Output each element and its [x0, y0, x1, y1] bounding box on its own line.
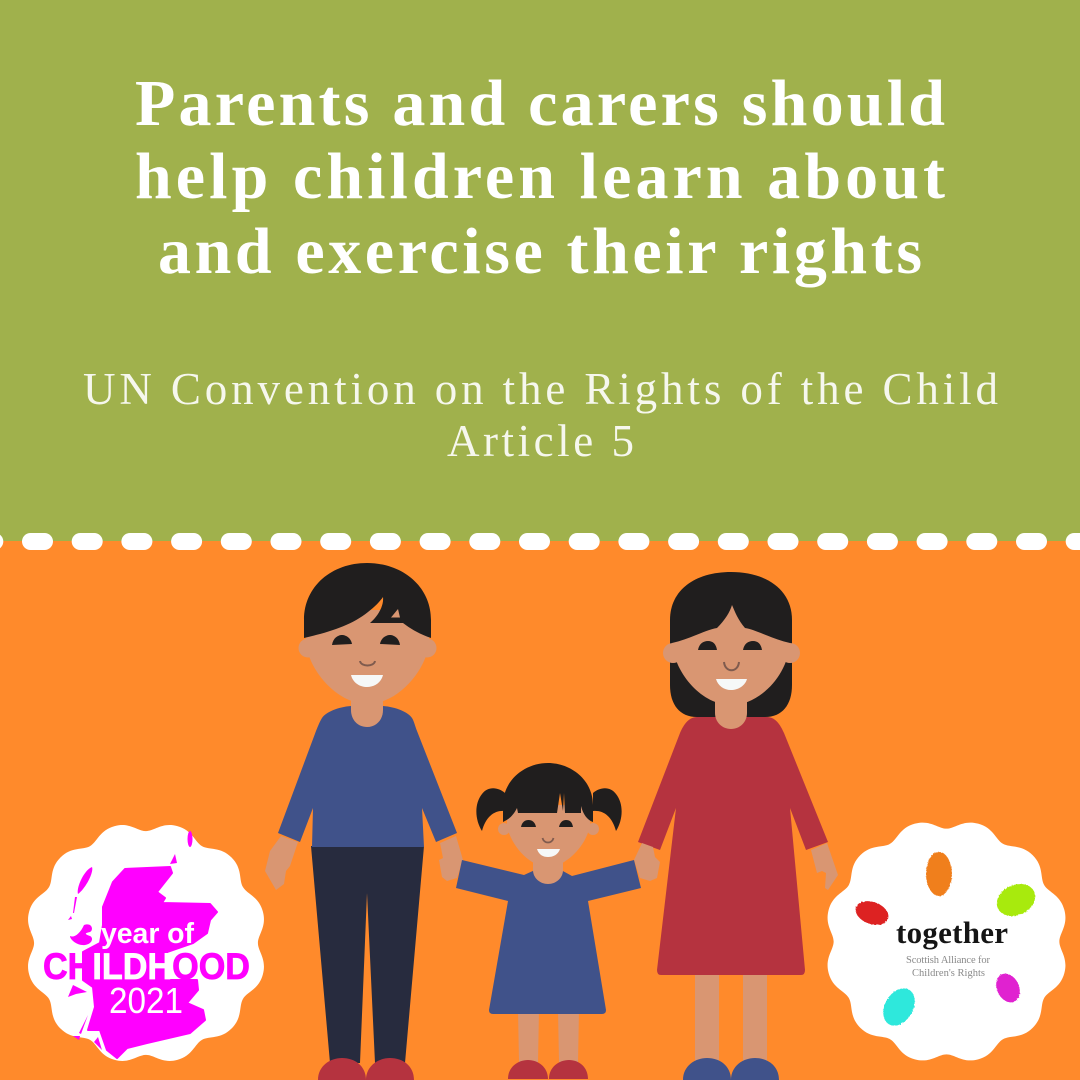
- mother dress: [638, 717, 828, 975]
- figure: child: [439, 763, 660, 1079]
- badge background: [828, 823, 1065, 1060]
- badge background: [28, 825, 264, 1061]
- child dress: [456, 860, 641, 1014]
- mother legs: [695, 970, 767, 1062]
- mother shoes: [683, 1058, 779, 1080]
- map of Scotland: [68, 831, 217, 1058]
- mother neck: [715, 695, 747, 729]
- child shoes: [508, 1060, 588, 1079]
- title: and exercise their rights: [158, 215, 922, 288]
- badge text: 2021: 2021: [109, 980, 183, 1021]
- father neck: [351, 695, 383, 727]
- badge: together: [828, 823, 1065, 1060]
- title: help children learn about: [135, 140, 945, 213]
- child face: [498, 763, 599, 867]
- title: Parents and carers should: [135, 67, 945, 140]
- subtitle: convention and article: [83, 364, 998, 466]
- subtitle: convention and article: UN Convention on the Rights of the Child: [83, 364, 998, 414]
- fingerprints: [852, 852, 1040, 1031]
- logo tagline: Scottish Alliance for: [906, 955, 990, 966]
- father head: [298, 563, 436, 704]
- child neck: [533, 860, 563, 884]
- child pigtails: [476, 788, 622, 831]
- mother hair back: [670, 572, 792, 717]
- logo tagline: [906, 955, 990, 979]
- badge: year of childhood 2021: [28, 825, 264, 1061]
- logo word: together: [896, 915, 1008, 950]
- mother right hand: [811, 843, 838, 890]
- subtitle: convention and article: Article 5: [447, 416, 634, 466]
- father legs: [311, 846, 424, 1063]
- figure: father: [265, 563, 457, 1080]
- father sweater: [278, 706, 457, 847]
- child legs: [518, 1010, 579, 1062]
- logo tagline: Children's Rights: [912, 968, 985, 979]
- child right hand: [634, 843, 660, 881]
- child left hand: [439, 836, 463, 881]
- figure: mother: [638, 572, 838, 1080]
- father shoes: [318, 1058, 414, 1080]
- father left hand: [265, 836, 298, 890]
- panel: orange illustration background: [0, 541, 1080, 1080]
- panel: green header background: [0, 0, 1080, 541]
- badge text: CHILDHOOD: CHILDHOOD: [43, 946, 250, 987]
- title: [135, 67, 945, 288]
- badge text: year of: year of: [101, 918, 194, 950]
- mother face: [663, 605, 800, 705]
